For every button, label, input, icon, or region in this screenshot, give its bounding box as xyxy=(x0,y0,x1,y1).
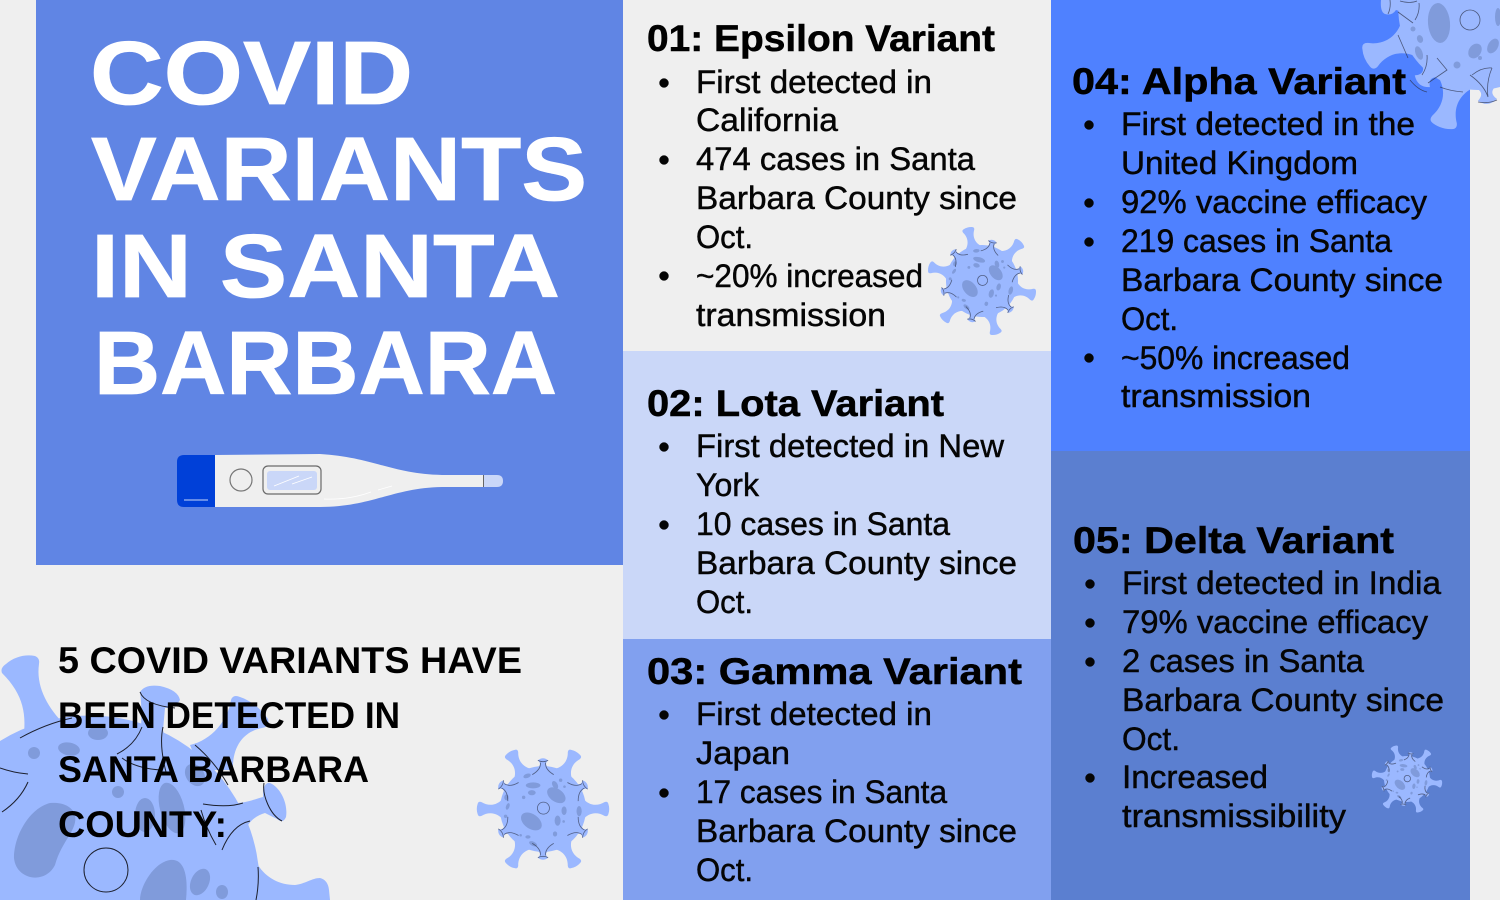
summary text: BEEN DETECTED IN xyxy=(58,695,400,736)
heading: 03: 03: Gamma Variant xyxy=(647,651,1022,692)
bullet list: 03: Oct. xyxy=(696,852,753,888)
bullet list: 01: California xyxy=(696,102,838,138)
icon: virus xyxy=(1367,741,1447,817)
bullet list: 05: 79% vaccine efficacy xyxy=(1122,604,1428,640)
bullet list: 02: First detected in New xyxy=(696,428,1005,464)
panel: 02 Lota xyxy=(623,351,1051,639)
bullet list: 03: Japan xyxy=(696,735,790,771)
bullet list: 01 xyxy=(660,64,1017,333)
bullet list: 05: Barbara County since xyxy=(1122,682,1444,718)
heading: 01: 01: Epsilon Variant xyxy=(647,18,995,59)
bullet list: 02: Barbara County since xyxy=(696,545,1017,581)
bullet list: 03: 17 cases in Santa xyxy=(696,774,947,810)
bullet list: 01: Barbara County since xyxy=(696,180,1017,216)
bullet list: 05: First detected in India xyxy=(1122,565,1441,601)
bullet list: 02: York xyxy=(696,467,760,503)
bullet list: 05: Oct. xyxy=(1122,721,1180,757)
summary text: COUNTY: xyxy=(58,804,227,845)
icon: top-right virus xyxy=(1356,0,1500,134)
bullet list: 04: transmission xyxy=(1121,378,1311,414)
summary text: 5 COVID VARIANTS HAVE xyxy=(58,640,522,681)
icon: large virus xyxy=(0,655,330,900)
title: COVID xyxy=(90,24,413,124)
bullet list: 04: Oct. xyxy=(1121,301,1178,337)
bullet list: 04: 219 cases in Santa xyxy=(1121,223,1392,259)
bullet list: 03: First detected in xyxy=(696,696,932,732)
bullet list: 05: 2 cases in Santa xyxy=(1122,643,1364,679)
bullet list: 05: Increased xyxy=(1122,759,1268,795)
bullet list: 02: Oct. xyxy=(696,584,753,620)
icon: virus xyxy=(477,746,609,872)
bullet list: 04: ~50% increased xyxy=(1121,340,1350,376)
bullet list: 01: ~20% increased xyxy=(696,258,923,294)
bullet list: 05 xyxy=(1086,565,1444,834)
icon: thermometer xyxy=(177,454,503,507)
title xyxy=(90,24,587,414)
bullet list: 04: United Kingdom xyxy=(1121,145,1358,181)
panel: 03 Gamma xyxy=(623,639,1051,900)
heading: 04: 04: Alpha Variant xyxy=(1072,61,1406,102)
icon: virus xyxy=(915,216,1049,346)
bullet list: 05: transmissibility xyxy=(1122,798,1346,834)
bullet list: 03 xyxy=(660,696,1017,888)
bullet list: 03: Barbara County since xyxy=(696,813,1017,849)
bullet list: 01: First detected in xyxy=(696,64,932,100)
panel: title xyxy=(36,0,623,565)
panel: summary xyxy=(0,640,609,900)
bullet list: 04: Barbara County since xyxy=(1121,262,1443,298)
panel: 04 Alpha xyxy=(1051,0,1500,451)
bullet list: 01: Oct. xyxy=(696,219,753,255)
bullet list: 04: 92% vaccine efficacy xyxy=(1121,184,1427,220)
panel: 05 Delta xyxy=(1051,451,1470,900)
summary text: SANTA BARBARA xyxy=(58,749,369,790)
heading: 02: 02: Lota Variant xyxy=(647,383,944,424)
title: BARBARA xyxy=(94,314,557,414)
bullet list: 02 xyxy=(660,428,1017,620)
bullet list: 01: transmission xyxy=(696,297,886,333)
title: VARIANTS xyxy=(91,120,587,220)
heading: 05: 05: Delta Variant xyxy=(1073,520,1394,561)
bullet list: 04 xyxy=(1084,106,1443,414)
bullet list: 04: First detected in the xyxy=(1121,106,1415,142)
title: IN SANTA xyxy=(91,217,560,317)
summary text xyxy=(58,640,522,845)
bullet list: 01: 474 cases in Santa xyxy=(696,141,975,177)
bullet list: 02: 10 cases in Santa xyxy=(696,506,950,542)
panel: 01 Epsilon xyxy=(623,0,1051,351)
